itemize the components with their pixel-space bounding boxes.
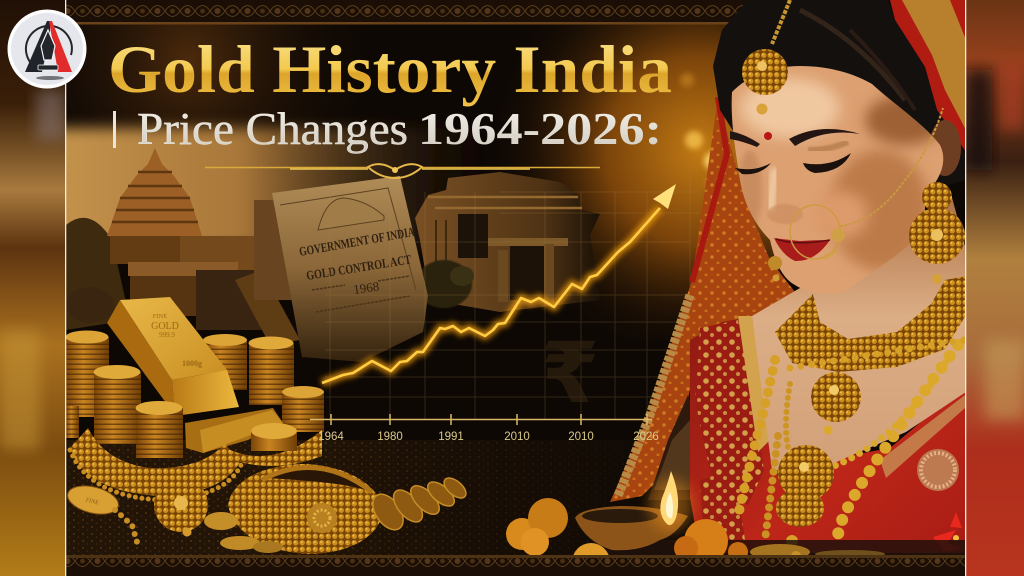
- gold bar with inscription: 1000g: [182, 359, 202, 368]
- title line two: Price Changes: [137, 103, 408, 154]
- woman's hair: [713, 0, 966, 190]
- title line one: Gold History India: [108, 31, 672, 107]
- wood floor: [66, 440, 640, 558]
- diya oil lamp with flame: [575, 471, 693, 550]
- top-right red and gold dupatta: [890, 0, 966, 152]
- timeline axis: 1980: [377, 431, 403, 443]
- sari gold embroidery: [695, 316, 965, 548]
- gold bowl with coins: [222, 423, 322, 466]
- government document: Gold Control Act 1968: [272, 176, 428, 362]
- facial features: [730, 129, 860, 261]
- small gold pieces and coins: [65, 481, 283, 553]
- woman's veil: [610, 97, 795, 502]
- rising price line glow: [322, 208, 660, 383]
- gold bangles: [367, 474, 469, 535]
- gold bar with inscription: [107, 297, 239, 416]
- timeline axis: 2026: [633, 431, 659, 443]
- logo ring arcs: [26, 26, 72, 62]
- woman's red sari blouse: [690, 316, 966, 553]
- bokeh sparkles: [680, 73, 722, 190]
- gold bar with inscription: 999.9: [159, 331, 175, 339]
- woman's face: [732, 66, 944, 294]
- old stone building: [415, 172, 600, 312]
- gold bar with inscription: FINE: [153, 313, 167, 320]
- front coin stacks and second bar: [94, 365, 283, 458]
- timeline axis: [310, 414, 659, 443]
- chart grid: [325, 165, 700, 420]
- skin of neck and chest: [752, 190, 966, 470]
- coin stacks: [66, 330, 324, 438]
- small gold pieces and coins: FINE: [85, 498, 100, 507]
- timeline axis: 2010: [504, 431, 530, 443]
- right blurred side panel: [966, 0, 1024, 576]
- rising price line with arrow: [322, 184, 676, 383]
- logo letter A: [25, 21, 72, 72]
- tree beside building: [416, 260, 474, 308]
- rupee watermark: ₹: [541, 324, 599, 422]
- top ornamental border: [66, 0, 766, 24]
- ear: [929, 120, 961, 176]
- necklace pendants: [776, 372, 861, 547]
- gold choker collar: [228, 464, 384, 554]
- table shadow: [600, 540, 965, 556]
- government document: Gold Control Act 1968: GOVERNMENT OF INDIA: [298, 224, 416, 259]
- timeline axis: 2010: [568, 431, 594, 443]
- temple scene: [66, 148, 300, 345]
- ornamental divider: [205, 164, 600, 178]
- gold choker necklace: [775, 276, 966, 372]
- small left earring: [768, 256, 782, 282]
- timeline axis: 1991: [438, 431, 464, 443]
- maang tikka forehead jewel: [742, 0, 790, 114]
- title line two: [113, 103, 662, 154]
- marigold flowers: [506, 498, 748, 576]
- left blurred side panel: [0, 0, 66, 576]
- bottom ornamental border: [66, 555, 965, 576]
- sari motif and red flower: [917, 449, 962, 552]
- circular logo badge: [8, 10, 86, 88]
- gold bar with inscription: GOLD: [151, 321, 179, 332]
- nose ring with chain: [790, 108, 943, 259]
- government document: Gold Control Act 1968: 1968: [352, 278, 380, 297]
- layered gold necklaces: [737, 340, 964, 544]
- timeline axis: 1964: [318, 431, 344, 443]
- chandelier earring: [909, 182, 965, 284]
- gold ornaments on table: [750, 544, 885, 572]
- government document: Gold Control Act 1968: GOLD CONTROL ACT: [305, 252, 412, 283]
- gold necklace and pendant: [70, 428, 241, 536]
- title line two: 1964-2026:: [418, 103, 662, 154]
